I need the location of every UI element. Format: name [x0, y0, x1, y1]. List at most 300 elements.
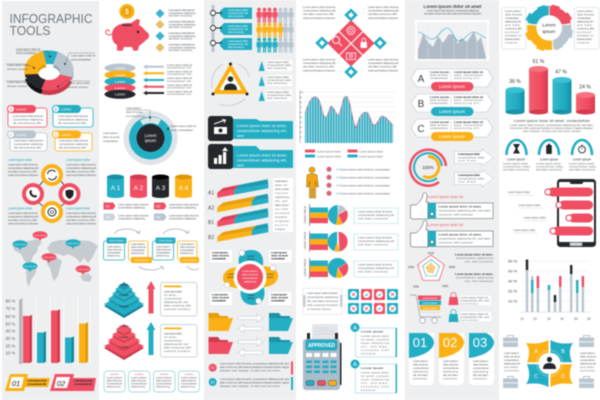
process text blocks: euismod tincidunt ut laoreet	[66, 222, 96, 226]
gear text left: consectetuer	[505, 16, 519, 20]
process text blocks: consectetuer adipiscing elit	[8, 166, 38, 170]
stacked disc list: Lorem ipsum dolor sit	[167, 89, 192, 93]
triangle list: consectetuer adip	[267, 93, 291, 97]
bar chart: 50 %	[6, 321, 15, 326]
stacked bar + pie row 1	[304, 204, 398, 226]
hex option A	[411, 69, 493, 91]
person with percent list	[306, 167, 390, 198]
POS terminal	[303, 324, 342, 390]
card D: Lorem	[61, 133, 71, 137]
thumbs up note 2: consectetuer adipiscing elit, sed diam	[438, 236, 491, 240]
process text blocks	[8, 158, 96, 226]
petal circle diagram	[223, 250, 278, 305]
hex option A: A	[418, 74, 425, 85]
donut labels: Lorem ipsum dolor	[7, 80, 29, 84]
arrow notes: sed diam	[458, 158, 477, 162]
key tags: Lorem ipsum dolor	[228, 8, 248, 12]
card C: Lorem	[16, 133, 26, 137]
hex option A: Lorem ipsum	[439, 84, 465, 89]
arch labels: Lorem ipsum	[573, 158, 592, 162]
person with percent list: Lorem ipsum dolor sit amet, consectetuer	[341, 168, 390, 172]
arch labels: sed diam nonummy	[569, 168, 596, 172]
flow boxes left: consectetuer	[131, 248, 145, 252]
hex option C: Lorem ipsum	[430, 120, 449, 124]
gear text left: sed diam	[505, 23, 521, 27]
process text blocks: sed diam nonummy nibh	[66, 170, 95, 174]
briefcase text: nonummy	[580, 368, 596, 372]
flow boxes right: dolor sit amet	[180, 245, 195, 249]
hex option C: consectetuer	[430, 126, 448, 130]
map pins: Lorem ipsum	[34, 234, 46, 237]
pyramid note 1: consectetuer	[164, 296, 182, 300]
banner: growth	[208, 144, 293, 169]
briefcase text: sed diam	[580, 365, 595, 369]
iso bars chart: euismod	[275, 211, 289, 215]
flow boxes left: Lorem ipsum	[109, 240, 124, 242]
hex option B: Lorem ipsum dolor sit	[454, 95, 483, 99]
ring diagram: ipsum	[145, 138, 157, 143]
arch labels: consectetuer adipi	[569, 164, 596, 168]
A cards: sit amet, consect	[361, 374, 389, 378]
bar: 40%	[37, 331, 46, 363]
radar notes: consectetuer adipiscing	[456, 276, 493, 280]
shopping bags: consectetuer elit, sed	[460, 298, 489, 302]
stacked disc list: Lorem	[115, 73, 125, 77]
diamond list: Lorem ipsum dolor sit amet	[168, 20, 195, 24]
heading: line chart: Lorem ipsum dolor sit amet	[424, 4, 482, 10]
petal circle diagram: ipsum	[248, 297, 254, 300]
iso bars chart: my nibh	[275, 207, 288, 211]
wave bar chart: 20	[300, 132, 303, 134]
bottom cards row: dolor sit amet	[181, 378, 196, 382]
bottom cards row: Lorem ipsum	[156, 376, 173, 380]
wave bar chart: 80	[300, 102, 303, 104]
donut labels: sit amet, consect	[68, 85, 88, 89]
phone with bars	[545, 179, 596, 247]
hex option C: adipiscing elit	[454, 126, 479, 130]
key tags: sed nonummy	[228, 14, 245, 18]
key tags: sed nonummy	[228, 30, 245, 34]
number card 02	[439, 333, 464, 385]
numbered legend: Lorem ipsum dolor sit amet,	[169, 214, 199, 218]
gear text right: euismod	[577, 30, 591, 34]
bottom cards row: Lorem	[135, 372, 144, 376]
bottom cards row: dolor sit amet	[131, 378, 146, 382]
shopping bags	[448, 292, 491, 322]
ring diagram: Lorem ipsum dolor sit	[171, 124, 196, 128]
numbered legend: Lorem ipsum dolor sit amet,	[169, 202, 199, 206]
arch labels: sed diam nonummy	[536, 168, 563, 172]
flow boxes right: Lorem ipsum	[182, 259, 197, 262]
icon: coin	[120, 4, 134, 19]
gear text left: dolor sit amet	[505, 12, 522, 16]
label 02: 02	[57, 379, 66, 388]
pyramid red	[104, 324, 144, 360]
bottom cards row: adipiscing	[156, 384, 170, 388]
gear text right: tincidunt ut	[577, 34, 593, 38]
icon: person	[306, 167, 318, 198]
label 01: consectetuer elit	[27, 382, 46, 386]
stacked disc list: Lorem ipsum dolor sit	[167, 83, 192, 87]
bar chart: 60 %	[6, 314, 15, 319]
numbered notes: 01	[211, 366, 215, 370]
bar chart	[6, 298, 90, 364]
bar: 60%	[23, 315, 32, 363]
bottom cards row: Lorem	[185, 372, 194, 376]
number card 02: adipiscing	[443, 370, 458, 374]
pyramid note 1: euismod tincidunt	[164, 307, 190, 311]
four diamond panel text: consectetuer adipiscing elit,	[368, 61, 399, 65]
wave bar chart: 10	[300, 137, 303, 139]
pyramid note 2: adipiscing elit, sed	[164, 342, 188, 346]
process text blocks: Lorem ipsum dolor	[8, 206, 33, 210]
bottom cards row: dolor sit amet	[106, 378, 122, 382]
ring diagram: Lorem ipsum	[103, 131, 119, 135]
hex option A: amet, consectetuer	[454, 73, 483, 77]
card C	[7, 130, 47, 151]
pyramid teal: Lorem	[120, 293, 129, 297]
banner: money: Lorem ipsum dolor sit amet,	[237, 123, 287, 128]
A cards: nonummy nibh	[361, 384, 389, 388]
diamond list: sed diam nonummy	[168, 14, 193, 18]
icon: phone	[29, 190, 37, 197]
icon: lock	[360, 38, 367, 48]
briefcase text: nonummy	[504, 368, 520, 372]
iso bars chart: A2	[208, 206, 214, 212]
shopping cart: Lorem ipsum	[423, 307, 437, 310]
flow boxes right: Lorem ipsum	[156, 244, 171, 248]
gear text left	[502, 8, 526, 49]
thumbs up note 2	[410, 221, 493, 247]
iso bars chart: B2	[208, 235, 214, 241]
petal circle diagram: Lorem	[247, 255, 255, 258]
radar notes: Lorem ipsum dolor sit amet,	[455, 272, 493, 276]
gear text right: adipiscing elit	[577, 20, 593, 24]
numbered legend: 01	[106, 204, 111, 208]
stacked disc list: Lorem	[115, 86, 125, 90]
radar chart	[408, 251, 456, 288]
card A: Lorem ipsum dolor sit amet	[13, 114, 43, 118]
petal circle diagram: adipiscing	[244, 280, 256, 284]
A cards: etuer adipiscing	[361, 341, 389, 345]
process text blocks: Lorem ipsum dolor sit amet,	[8, 211, 38, 215]
bottom cards row: consectetuer	[131, 382, 147, 386]
stacked disc list: consectetuer elit	[167, 92, 191, 96]
key tags: consectetuer elit	[228, 27, 248, 31]
briefcase text: dolor sit amet	[580, 354, 596, 358]
card B: consectetuer adipiscing	[58, 118, 88, 122]
flow boxes right: consectetuer	[156, 250, 170, 254]
person with percent list: 10%	[336, 167, 342, 171]
card C: Lorem ipsum dolor sit amet	[14, 138, 43, 142]
numbered legend: Lorem ipsum dolor sit amet,	[118, 202, 149, 206]
wave bar chart: 100	[300, 92, 304, 94]
flow boxes left: adipiscing	[131, 251, 144, 255]
process text blocks: consectetuer adipiscing elit	[66, 166, 96, 170]
gear text left: Lorem ipsum	[505, 9, 522, 13]
diamond list: consectetuer adipiscing	[168, 22, 196, 26]
bottom cards row: Lorem ipsum	[106, 376, 123, 380]
stacked bar + pie row 1: Lorem ipsum dolor sit amet	[358, 210, 392, 214]
column chart: 10	[520, 317, 524, 321]
arrow notes: consectetuer adip	[458, 156, 484, 160]
pyramid red: Lorem	[120, 345, 129, 349]
A cards: nonummy nibh	[361, 348, 389, 352]
four diamond panel text: consectetuer adipiscing elit,	[303, 61, 336, 65]
icon: target	[347, 26, 355, 34]
donut chart	[6, 50, 95, 95]
thumbs up note 1: consectetuer adipiscing elit, sed diam	[438, 208, 491, 212]
banner: growth: consectetuer adipiscing elit,	[237, 158, 287, 162]
flow boxes right: dolor sit amet	[156, 248, 171, 252]
stacked bar + pie row 2: LOREM IPSUM	[304, 232, 307, 250]
bottom cards row: Lorem	[110, 372, 119, 376]
gear diagram: Lorem	[542, 22, 556, 28]
petal notes: Lorem ipsum	[212, 292, 228, 296]
gear text left: nonummy nibh	[505, 26, 522, 30]
shopping bags: Lorem ipsum dolor sit	[460, 296, 488, 300]
iso bars chart: magna	[275, 227, 285, 231]
column chart: 40 %	[508, 268, 518, 274]
shopping cart: Lorem ipsum	[423, 297, 437, 300]
bottom cards row: consectetuer	[106, 382, 123, 386]
radar chart: 6000	[449, 265, 456, 269]
process text blocks: euismod tincidunt ut laoreet	[8, 173, 38, 177]
donut labels	[7, 47, 95, 89]
hex option A: Lorem ipsum	[430, 70, 449, 74]
ring diagram: consectetuer	[103, 139, 118, 143]
iso bars chart: ctetuer	[275, 191, 288, 195]
gear text left: adipiscing elit	[505, 20, 521, 24]
label 02: Lorem ipsum dolor	[74, 378, 94, 382]
flow boxes right: adipiscing	[180, 251, 193, 255]
process text blocks: Lorem ipsum dolor	[8, 158, 33, 162]
number card 01	[409, 333, 434, 385]
petal notes: Lorem ipsum	[212, 250, 228, 254]
icon: businessman	[224, 76, 237, 90]
card D	[52, 130, 92, 151]
icon: shield	[66, 190, 74, 199]
map pins: Lorem ipsum	[24, 265, 36, 268]
gear text left: laoreet dolore	[505, 37, 520, 41]
gear text right: dolor sit amet	[577, 12, 594, 16]
check tiles	[348, 289, 398, 314]
number card 03	[469, 333, 494, 385]
thumbs up note 1: Lorem ipsum dolor sit amet,	[438, 204, 482, 208]
pyramid note 1: adipiscing elit, sed	[164, 300, 188, 304]
number card 03: Lorem ipsum	[473, 359, 489, 363]
iso bars chart: diam nonum	[275, 203, 290, 207]
bottom cards row: Lorem	[160, 372, 169, 376]
bar B1	[217, 208, 268, 227]
A cards: A	[353, 326, 357, 332]
numbered notes: 02	[211, 380, 215, 384]
checklist note: Lorem ipsum dolor sit amet,	[307, 291, 338, 295]
stacked bar + pie row 3	[304, 258, 398, 279]
number card 02: elit, sed diam	[443, 373, 459, 377]
stacked bar + pie row 1: sed diam nonummy	[358, 216, 389, 220]
arrow red up	[146, 281, 156, 314]
column chart	[508, 258, 591, 321]
petal notes: Lorem ipsum	[271, 250, 287, 254]
stacked disc list: Lorem	[115, 66, 125, 70]
banner: money: sed	[237, 133, 243, 138]
arrow notes: sed diam	[458, 180, 477, 184]
A cards: A	[353, 362, 357, 368]
petal circle diagram: Lorem	[247, 294, 255, 297]
card A: A	[10, 106, 13, 112]
key tags: Lorem ipsum dolor	[228, 39, 248, 43]
hex option C: dolor sit amet	[430, 123, 448, 127]
petal notes: dolor sit amet	[271, 296, 288, 300]
four diamond panel text: consectetuer adipiscing elit,	[303, 8, 336, 12]
checklist note: nibh euismod tincidunt	[307, 303, 338, 307]
bar A2	[217, 194, 268, 212]
wave bar chart: 60	[300, 112, 303, 114]
flow boxes left: adipiscing	[107, 254, 120, 258]
thumbs up note 2: Lorem ipsum dolor sit	[428, 223, 463, 227]
number card 01: 01	[413, 335, 427, 350]
iso bars chart: B1	[208, 220, 214, 226]
hex option B	[411, 94, 493, 116]
arrow teal up	[146, 322, 156, 355]
phone labels: Lorem ipsum dolor	[508, 190, 530, 194]
petal circle diagram: ipsum	[248, 258, 254, 261]
hex option C: amet, consectetuer	[454, 123, 483, 127]
banner: growth: Lorem ipsum dolor sit amet,	[237, 152, 287, 158]
radar chart: 1300	[442, 284, 449, 288]
stacked bar + pie row 2: Lorem ipsum dolor sit amet	[358, 236, 392, 240]
numbered legend: 04	[156, 214, 161, 220]
four diamond panel text: sed diam nonummy nibh	[303, 12, 334, 16]
bar chart: 10 %	[6, 350, 15, 356]
card A	[7, 105, 47, 127]
banner: growth: sed	[237, 162, 243, 168]
phone labels: Lorem ipsum dolor	[524, 216, 546, 220]
bottom cards row: adipiscing	[106, 384, 121, 388]
ring diagram: Lorem ipsum	[126, 106, 142, 110]
cylinder 24%	[576, 92, 595, 114]
number card 02: dolor sit amet	[443, 362, 458, 366]
number card 02: 02	[443, 335, 457, 350]
A cards: sit amet, consect	[361, 338, 389, 342]
bar: 30%	[65, 336, 74, 363]
arch labels: Lorem ipsum dolor	[503, 162, 528, 166]
checklist note: elit, sed diam nonummy	[307, 299, 339, 303]
column chart: 40	[560, 317, 564, 321]
3D cylinder chart: 36 %	[509, 79, 521, 85]
key tags: consectetuer elit	[228, 42, 248, 46]
four diamond panel text: euismod tincidunt ut laoreet	[368, 68, 398, 72]
gear text right: laoreet dolore	[577, 37, 592, 41]
A cards: Lorem ipsum dolor	[361, 370, 389, 374]
stacked disc list: Lorem ipsum dolor sit	[167, 63, 192, 67]
column chart: 20	[533, 317, 537, 321]
A cards: Lorem ipsum	[361, 366, 383, 370]
column chart: 50 %	[508, 258, 518, 264]
petal notes: consectetuer	[212, 298, 227, 302]
diamond list: Lorem ipsum dolor sit amet	[168, 31, 195, 35]
bar B2	[217, 223, 268, 242]
petal circle diagram: Lorem	[266, 273, 274, 276]
triangle list: sed nonummy	[267, 96, 288, 100]
map pins	[12, 231, 90, 275]
chart legend: Lorem ipsum dolor	[359, 154, 383, 158]
pyramid note 2	[160, 324, 197, 357]
thumbs up note 1: Lorem ipsum dolor sit	[428, 195, 463, 199]
process text blocks: Lorem ipsum dolor sit amet,	[8, 162, 38, 166]
flow boxes left: dolor sit amet	[131, 245, 146, 249]
flow boxes right: consectetuer	[180, 248, 194, 252]
four diamond panel text: sed diam nonummy nibh	[368, 12, 397, 16]
briefcase text: consectetuer	[504, 358, 519, 362]
label 01: Lorem ipsum dolor	[27, 378, 48, 382]
radar notes: consectetuer adipiscing	[456, 256, 493, 260]
petal notes	[210, 250, 292, 305]
title: TOOLS	[10, 23, 51, 38]
panel: A B C D cards	[7, 105, 93, 151]
flow boxes right: adipiscing	[156, 254, 169, 258]
card D: consectetuer adipiscing	[59, 142, 88, 146]
bottom cards row: consectetuer	[156, 382, 172, 386]
arch labels: Lorem ipsum dolor	[569, 162, 594, 166]
four diamond panel text: euismod tincidunt ut laoreet	[303, 16, 335, 20]
arch labels: consectetuer adipi	[536, 164, 563, 168]
flow boxes left: Lorem ipsum	[131, 242, 146, 246]
bottom cards row: adipiscing	[131, 384, 145, 388]
icon: gear	[48, 208, 56, 216]
map pins: Lorem ipsum	[43, 256, 55, 259]
icon: coin: $	[125, 9, 129, 16]
arrow notes: Lorem ipsum dolor	[458, 152, 481, 156]
wave bar chart: 90	[300, 97, 303, 99]
column chart: 30 %	[508, 278, 518, 284]
process text blocks: sed diam nonummy nibh	[66, 218, 95, 222]
pyramid teal: Lorem	[120, 304, 129, 308]
process text blocks: Lorem ipsum dolor sit amet,	[66, 211, 96, 215]
title	[10, 11, 92, 38]
shopping bags: nonummy	[460, 301, 479, 305]
stacked bar + pie row 2: consectetuer adipiscing elit	[358, 239, 394, 243]
triangle list: consectetuer adip	[267, 78, 291, 82]
heading: line chart: sed diam nonummy nibh euismod tincidunt ut laoreet	[424, 12, 481, 16]
stacked disc list: consectetuer elit	[167, 79, 191, 83]
radar chart: 6100	[428, 251, 435, 255]
hex option A: dolor sit amet	[430, 73, 448, 77]
stacked disc list: Lorem	[115, 80, 125, 84]
numbered notes: Lorem ipsum dolor sit amet, consectetuer adipiscing elit, sed	[220, 377, 289, 381]
donut labels: amet, consectetuer	[71, 58, 91, 62]
stacked bar + pie row 3: LOREM IPSUM	[304, 259, 307, 277]
number card 01: adipiscing	[413, 370, 428, 374]
process text blocks: Lorem ipsum dolor	[66, 158, 91, 162]
key tags	[210, 5, 252, 52]
curved arrows	[114, 229, 199, 270]
bottom cards row: Lorem ipsum	[131, 376, 148, 380]
numbered legend	[104, 202, 199, 220]
hex option A: consectetuer	[430, 76, 448, 80]
bar A1	[217, 179, 268, 198]
ring diagram	[103, 106, 196, 165]
arch labels: Lorem ipsum	[507, 158, 526, 162]
hex option B: Lorem ipsum	[430, 95, 449, 99]
pyramid note 2: euismod tincidunt	[164, 349, 190, 353]
diamond list: sed diam nonummy	[168, 25, 193, 29]
bottom cards row: dolor sit amet	[156, 378, 171, 382]
heading: line chart: Lorem ipsum dolor sit amet, consectetuer adipiscing	[427, 8, 479, 12]
stacked bar + pie row 2	[304, 231, 398, 252]
petal diagram with person	[526, 340, 573, 387]
